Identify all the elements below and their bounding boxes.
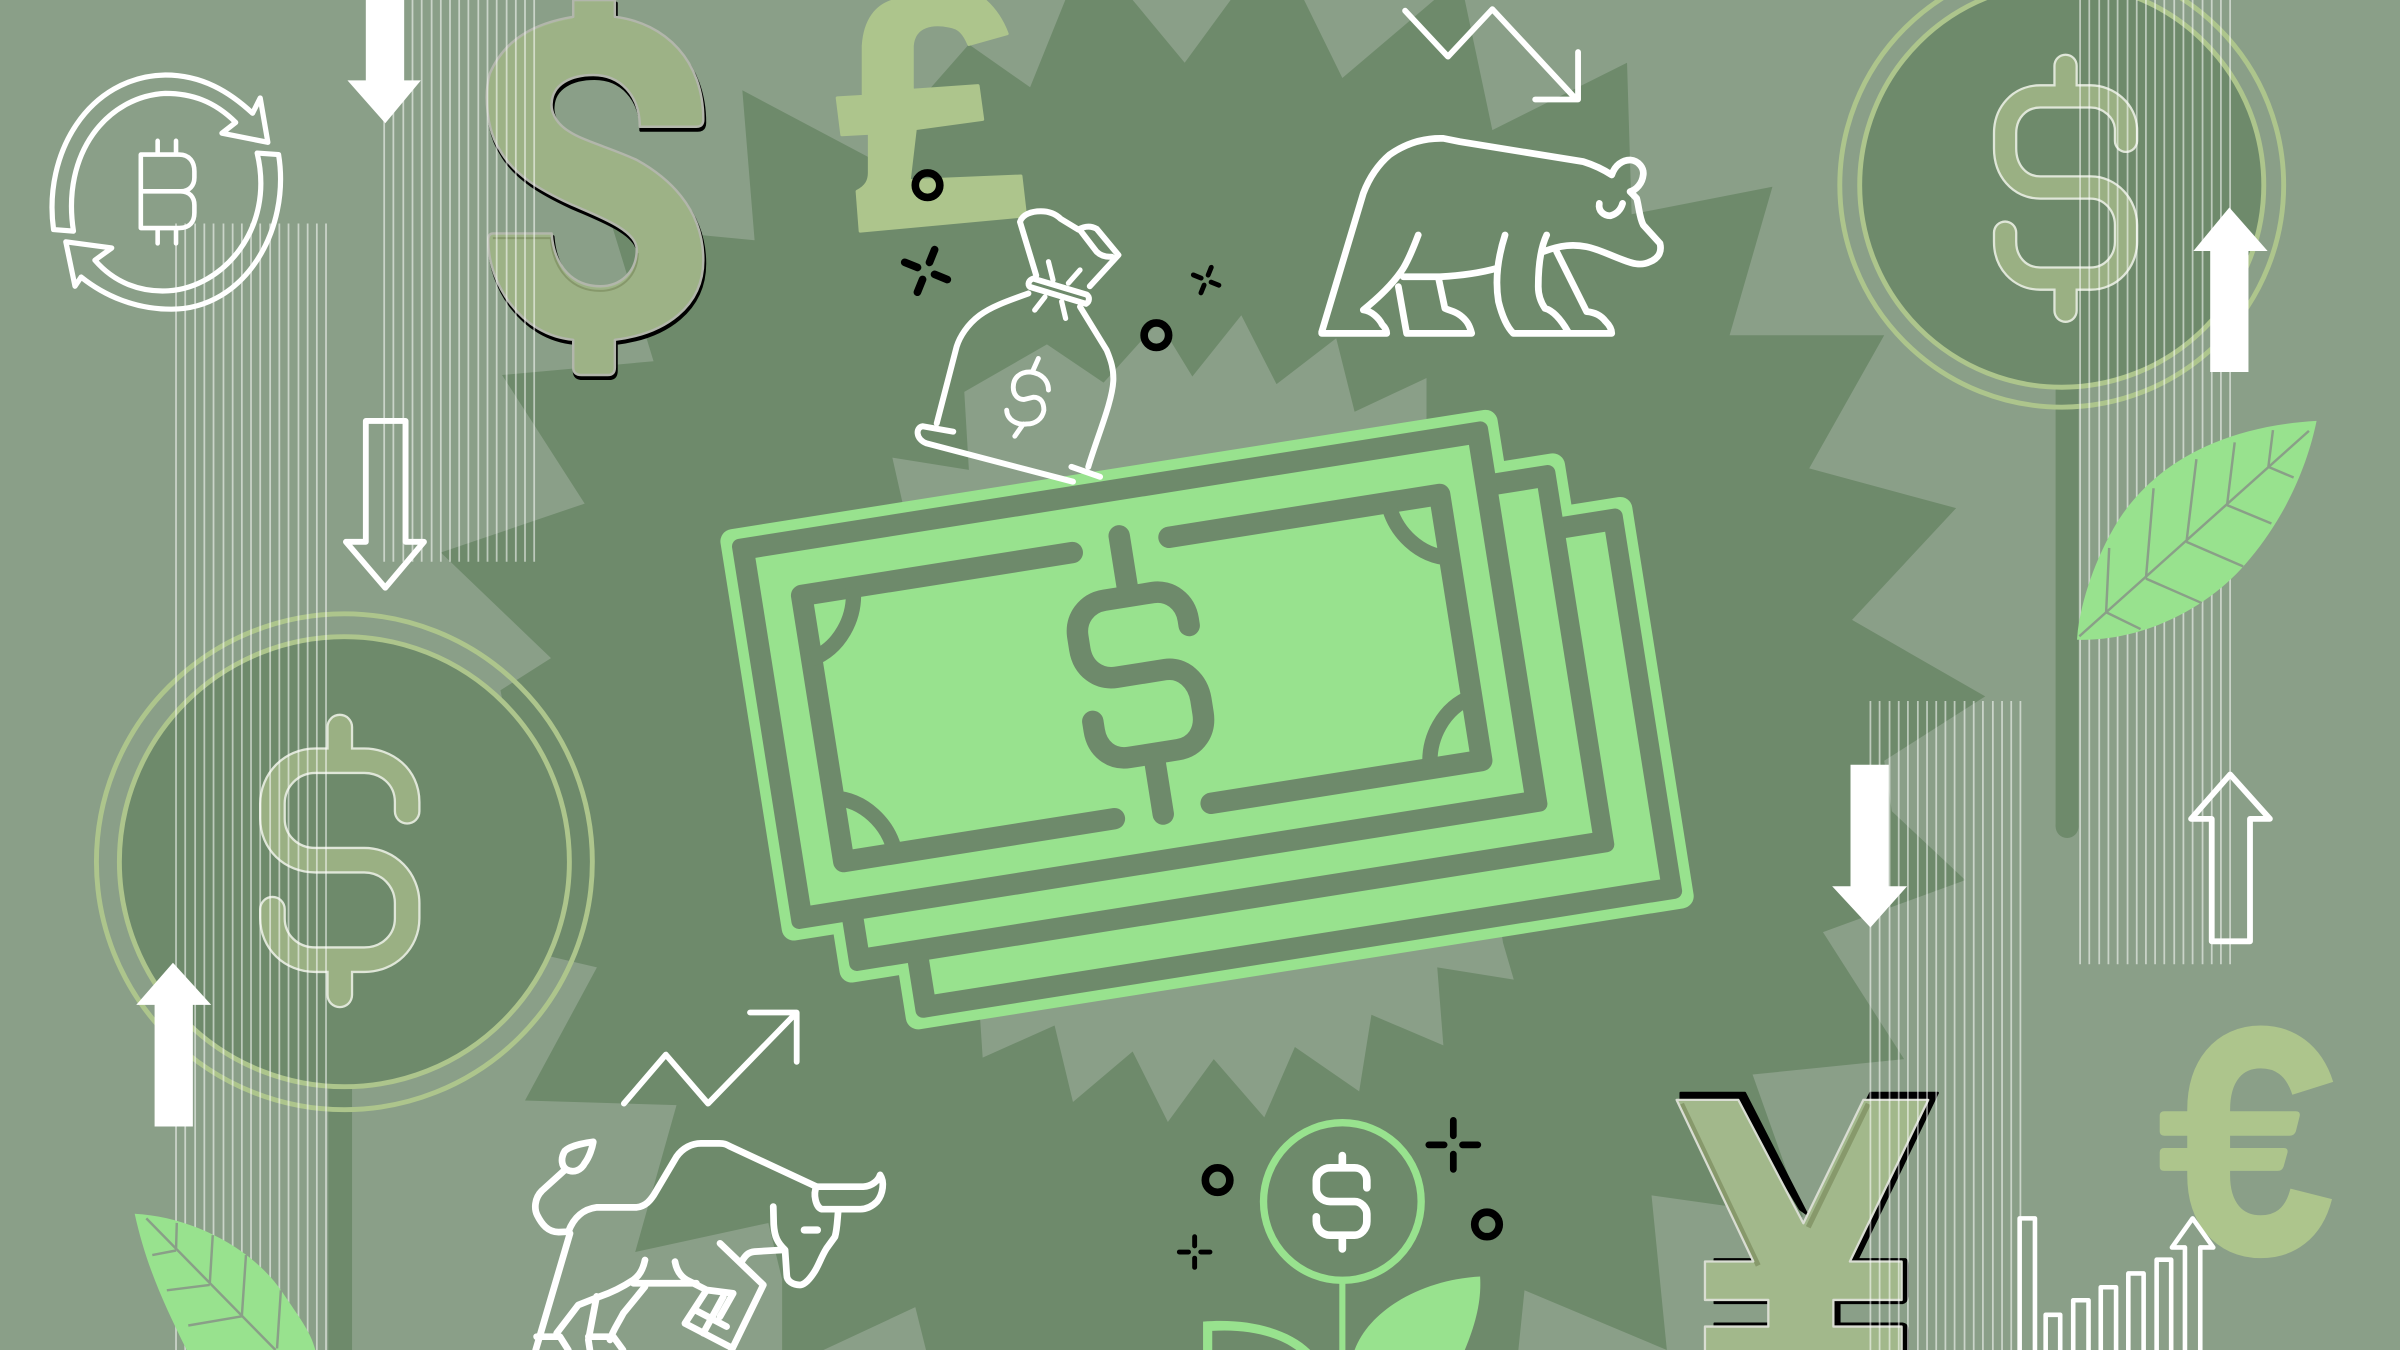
sparkle: large	[896, 241, 956, 301]
inner frame	[802, 494, 1482, 862]
arrow: solid up right	[2193, 208, 2268, 372]
arrow: hollow up right	[2191, 774, 2270, 941]
icon: money bag	[918, 211, 1118, 482]
arrow: hollow down	[346, 421, 424, 588]
yen sign	[1677, 1093, 1938, 1350]
vertical lines group: top	[384, 0, 534, 562]
sparkle: plant left	[1179, 1237, 1210, 1267]
black ring: top left	[915, 173, 940, 197]
vertical lines group: left	[176, 223, 326, 1350]
arrow: solid up left	[136, 963, 211, 1127]
light inner starburst	[892, 315, 1514, 1122]
coin plant left	[96, 614, 592, 1350]
vertical lines group: upper right	[2080, 0, 2230, 964]
black ring: plant right	[1475, 1212, 1499, 1237]
icon: bull	[535, 1142, 883, 1350]
middle note	[789, 464, 1615, 972]
sparkle: plant right	[1429, 1120, 1478, 1169]
front note	[731, 420, 1549, 930]
icon: bar chart with arrow	[2020, 1218, 2213, 1350]
dollar on note	[1063, 527, 1218, 823]
bright silhouette	[719, 389, 1695, 1048]
icon: rising chart arrow	[624, 1012, 797, 1104]
black ring: plant left	[1205, 1168, 1230, 1192]
black ring: centre	[1144, 323, 1169, 347]
corner arcs	[802, 494, 1482, 862]
vertical lines group: lower right	[1870, 701, 2020, 1350]
icon: bitcoin exchange cycle	[52, 75, 281, 309]
icon: falling chart arrow	[1405, 9, 1578, 99]
icon: leaf right	[2077, 421, 2317, 640]
euro sign	[2160, 1047, 2313, 1237]
coin plant right	[1840, 0, 2284, 838]
back note	[855, 507, 1683, 1019]
pound sign	[837, 0, 1026, 231]
dark starburst	[441, 0, 1985, 1350]
sparkle: small	[1188, 262, 1224, 298]
icon: leaf left	[135, 1214, 315, 1350]
big dollar sign	[487, 0, 705, 378]
arrow: solid down top	[347, 0, 421, 123]
arrow: solid down right	[1832, 765, 1907, 928]
icon: dollar plant	[1203, 1123, 1480, 1350]
banknote stack	[719, 389, 1695, 1048]
icon: bear	[1322, 138, 1661, 333]
